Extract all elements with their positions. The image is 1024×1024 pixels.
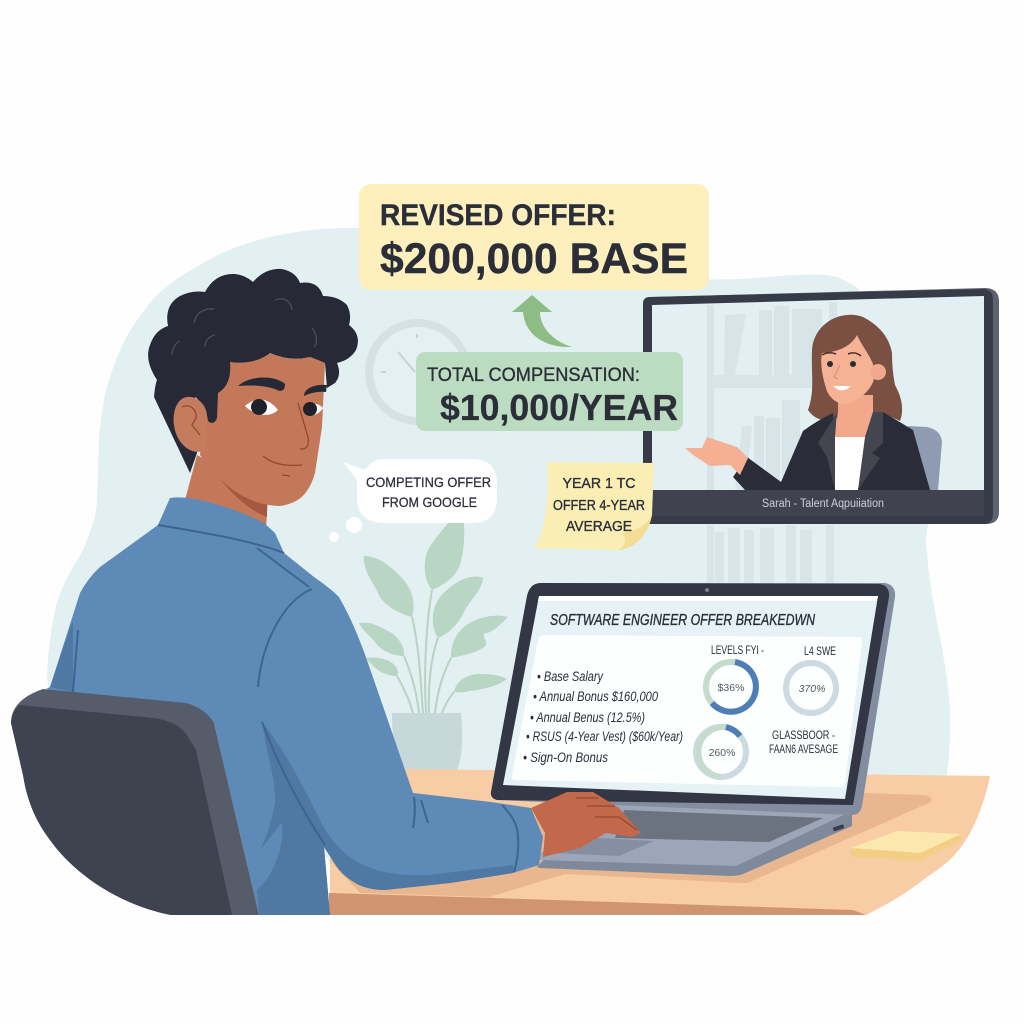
donut chart: glassdoor: 260% [709, 747, 735, 759]
video call monitor [643, 288, 999, 524]
monitor frame [643, 288, 999, 524]
face [821, 335, 875, 405]
compensation list: • Sign-On Bonus [523, 750, 608, 765]
arrow: upward green [512, 295, 572, 347]
shirt [46, 497, 543, 915]
plant leaves [359, 523, 508, 692]
desk [329, 769, 990, 915]
facial features [822, 353, 861, 390]
speech bubble: competing offer: FROM GOOGLE [382, 494, 477, 510]
sticky note: year 1 TC [534, 462, 654, 550]
plant stems [397, 590, 454, 713]
desk top [330, 769, 990, 915]
sticky note on desk [851, 831, 961, 861]
compensation list [523, 669, 683, 765]
callout: total compensation: TOTAL COMPENSATION: [427, 364, 640, 386]
white shirt [834, 437, 866, 490]
chart labels: L4 SWE [804, 646, 836, 658]
compensation list: • Annual Bonus $160,000 [533, 689, 658, 704]
callout: revised offer: $200,000 BASE [380, 235, 688, 283]
donut chart: L4 SWE [786, 663, 836, 713]
name caption: Sarah - Talent Aqpuiiation [762, 498, 884, 510]
laptop screen [503, 596, 878, 799]
donut chart: L4 SWE: 370% [799, 683, 825, 695]
keyboard [615, 810, 823, 842]
woman presenter [685, 315, 930, 490]
face [200, 353, 325, 506]
monitor screen [652, 296, 984, 490]
hair [148, 269, 358, 473]
sticky note: year 1 TC: OFFER 4-YEAR [553, 497, 645, 514]
bookshelf behind monitor [707, 525, 834, 585]
background blob [47, 228, 950, 860]
open hand [685, 437, 748, 475]
shirt seams [73, 525, 518, 872]
sticky note: year 1 TC: AVERAGE [566, 518, 632, 535]
hair [808, 315, 902, 421]
hair curl highlights [172, 299, 316, 355]
desk front edge [329, 893, 866, 915]
potted plant [359, 523, 508, 770]
ear [174, 397, 207, 452]
shelf in video background [707, 302, 837, 490]
callout: revised offer: REVISED OFFER: [380, 199, 616, 232]
port [833, 824, 844, 831]
donut chart: glassdoor [696, 727, 746, 777]
compensation list: • Base Salary [537, 669, 604, 684]
plant pot [392, 713, 462, 770]
office chair [11, 689, 259, 915]
laptop lid [491, 583, 895, 815]
lapels [818, 412, 883, 490]
wall clock [369, 323, 467, 421]
office chair in video [905, 426, 942, 490]
nose and mouth [182, 403, 308, 476]
callout: revised offer [359, 184, 709, 290]
eyes [245, 399, 323, 416]
speech bubble: competing offer [329, 459, 497, 542]
jaw shadow [217, 475, 267, 517]
eyebrows [238, 377, 327, 396]
name bar [652, 490, 984, 516]
callout: total compensation: $10,000/YEAR [440, 387, 678, 428]
laptop [491, 583, 895, 876]
compensation list: • RSUS (4-Year Vest) ($60k/Year) [526, 729, 683, 744]
neck [185, 455, 268, 530]
speech bubble: competing offer: COMPETING OFFER [366, 474, 491, 490]
donut chart: levels fyi: $36% [718, 682, 744, 694]
laptop and arm shadow [329, 793, 932, 897]
offer panel [512, 635, 862, 787]
sticky note: year 1 TC: YEAR 1 TC [562, 475, 636, 492]
chart labels [711, 645, 838, 756]
chart labels: FAAN6 AVESAGE [769, 744, 838, 756]
chart labels: LEVELS FYI - [711, 645, 764, 657]
shirt shadows [50, 620, 513, 915]
donut chart: levels fyi [706, 662, 756, 712]
chart labels: GLASSBOOR - [772, 730, 835, 742]
callout: total compensation [416, 352, 683, 431]
ear [870, 364, 886, 380]
webcam [705, 588, 709, 592]
trackpad [554, 838, 654, 856]
man from behind [46, 269, 641, 915]
hand on keyboard [531, 792, 641, 857]
compensation list: • Annual Benus (12.5%) [530, 710, 645, 725]
screen title: SOFTWARE ENGINEER OFFER BREAKEDWN [550, 612, 816, 629]
neck [834, 395, 873, 447]
laptop base [537, 800, 852, 876]
jacket and arm [733, 412, 930, 490]
